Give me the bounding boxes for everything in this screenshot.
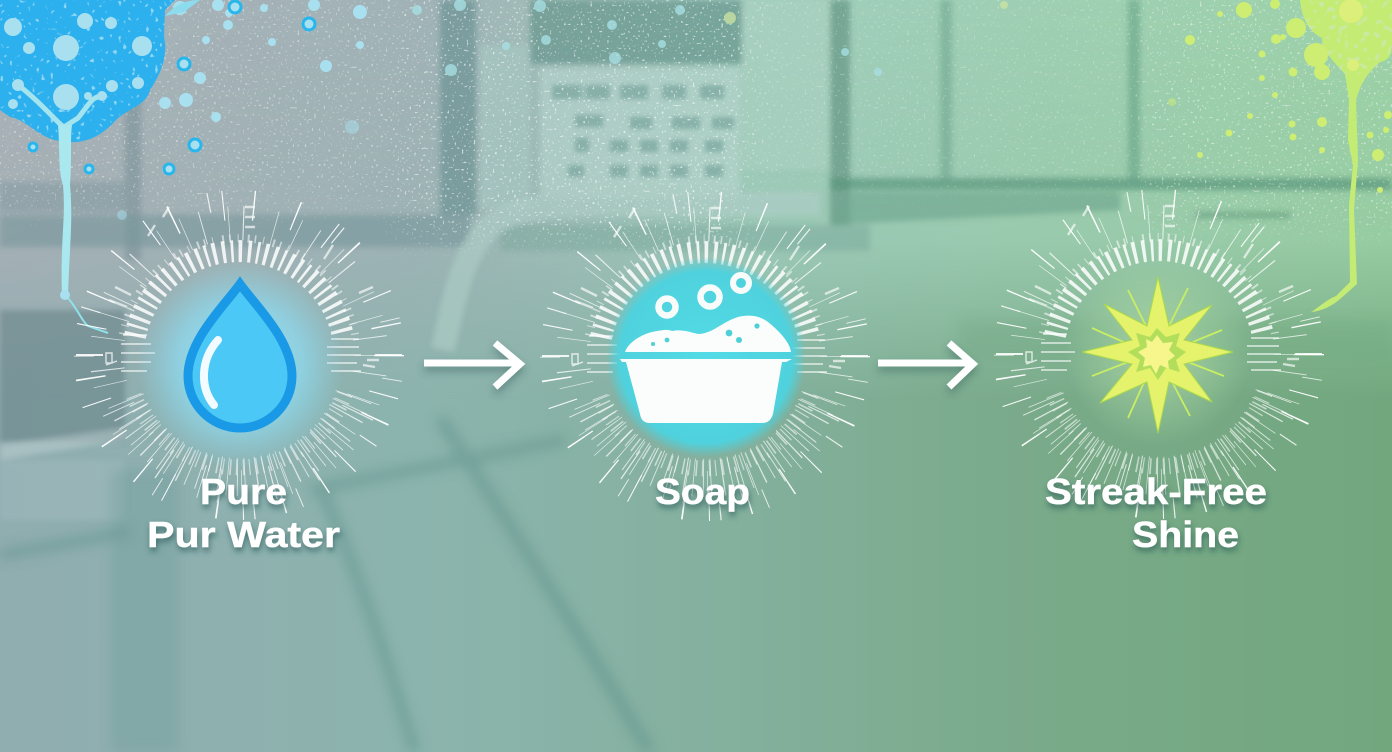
glow behind soap tub bbox=[606, 257, 806, 457]
icon: water drop bbox=[188, 284, 292, 428]
arrow: water to soap bbox=[424, 343, 520, 387]
label: pure pur water: Pur Water bbox=[147, 514, 340, 555]
speckled paint spray over the top of the scene bbox=[0, 0, 1392, 254]
green paint splatter, top right bbox=[1168, 0, 1392, 312]
arrow: soap to shine bbox=[878, 343, 973, 387]
step 1: pure water bbox=[62, 178, 416, 555]
step 3: streak-free shine bbox=[982, 177, 1336, 555]
glow behind water drop bbox=[136, 261, 344, 469]
radial burst around water drop bbox=[62, 178, 416, 532]
label: streak-free shine bbox=[1045, 471, 1267, 555]
glow behind star bbox=[1063, 257, 1253, 447]
radial burst around soap tub bbox=[528, 179, 882, 533]
icon: shine star bbox=[1082, 277, 1233, 433]
spray highlights, top centre bbox=[412, 0, 1008, 76]
label: streak-free shine: Streak-Free bbox=[1045, 471, 1267, 512]
label: soap: Soap bbox=[655, 471, 750, 512]
blue paint splatter, top left bbox=[0, 0, 367, 333]
label: pure pur water: Pure bbox=[200, 471, 287, 512]
label: streak-free shine: Shine bbox=[1132, 514, 1239, 555]
label: pure pur water bbox=[147, 471, 340, 555]
icon: soap tub with bubbles bbox=[620, 275, 792, 423]
radial burst around star bbox=[982, 177, 1336, 531]
step 2: soap bbox=[528, 179, 882, 533]
